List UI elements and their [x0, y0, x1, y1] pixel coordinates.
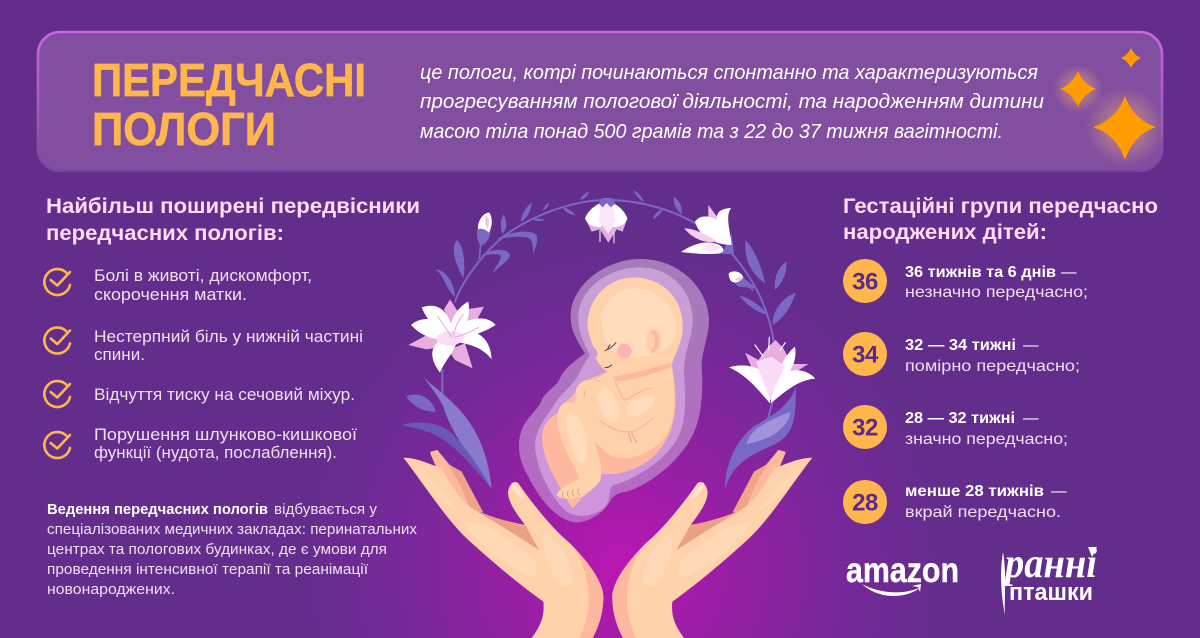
left leaves: [401, 378, 492, 488]
right heading: [843, 195, 1158, 244]
left heading: Найбільш поширені передвісники: [46, 195, 420, 218]
gestational group 34: 34: [852, 342, 879, 368]
wreath leaves: [435, 190, 796, 325]
gestational group 32: —: [1023, 410, 1039, 427]
management paragraph: новонароджених.: [47, 582, 175, 598]
gestational group 32: 32: [852, 414, 878, 442]
flower: left lily: [408, 299, 496, 373]
symptom 4: [44, 425, 357, 462]
symptom 3: [44, 381, 355, 407]
gestational group 32: [843, 405, 1068, 449]
right leaf: [725, 386, 796, 489]
amniotic sac outer layer: [519, 259, 709, 522]
management paragraph: Ведення передчасних пологів: [47, 502, 268, 518]
gestational group 34: помірно передчасно;: [905, 358, 1080, 375]
logo: ранні пташки: ранні: [1002, 541, 1097, 587]
gestational group 28: менше 28 тижнів: [905, 483, 1044, 500]
symptom 4: функції (нудота, послаблення).: [94, 443, 337, 462]
definition text: це пологи, котрі починаються спонтанно та характеризуються: [420, 62, 1038, 84]
flower: small right bud: [729, 271, 757, 288]
left heading: [46, 195, 420, 245]
right heading: народжених дітей:: [843, 221, 1047, 244]
gestational group 36: —: [1061, 264, 1077, 281]
gestational group 34: [843, 332, 1080, 376]
management paragraph: спеціалізованих медичних закладах: перинатальних: [47, 522, 418, 538]
icon: sparkles: [1053, 48, 1165, 167]
symptom 2: Нестерпний біль у нижній частині: [94, 327, 363, 346]
amniotic sac inner layer: [535, 267, 693, 516]
symptom 1: [44, 266, 312, 304]
logo: ранні пташки: [1001, 541, 1097, 615]
baby: [542, 278, 683, 508]
left hand: [403, 450, 603, 638]
gestational group 36: незначно передчасно;: [905, 284, 1088, 301]
symptom 3: Відчуття тиску на сечовий міхур.: [94, 385, 355, 404]
symptoms list: [44, 266, 363, 462]
gestational group 36: [843, 259, 1088, 303]
gestational group 32: 28 — 32 тижні: [905, 410, 1015, 427]
management paragraph: [47, 502, 418, 598]
flower: top bell: [585, 198, 627, 243]
gestational group 28: [843, 480, 1067, 524]
gestational group 28: 28: [852, 490, 878, 516]
title: [92, 54, 366, 155]
title: ПЕРЕДЧАСНІ: [92, 54, 366, 106]
gestational group 28: —: [1051, 483, 1067, 500]
illustration: baby held by hands with floral wreath: [401, 190, 815, 638]
flower: right lily: [729, 337, 815, 403]
logo: amazon: amazon: [846, 551, 959, 590]
floral wreath vines: [442, 200, 774, 423]
symptom 1: Болі в животі, дискомфорт,: [94, 266, 312, 285]
right hand: [612, 450, 812, 638]
definition text: масою тіла понад 500 грамів та з 22 до 37 тижня вагітності.: [420, 121, 1003, 143]
gestational group 34: 32 — 34 тижні: [905, 337, 1016, 354]
left heading: передчасних пологів:: [46, 222, 284, 245]
flower: left bud: [477, 213, 492, 246]
management paragraph: проведення інтенсивної терапії та реанімації: [47, 562, 368, 578]
flower: top right tulip: [681, 205, 734, 254]
definition text: прогресуванням пологової діяльності, та народженням дитини: [420, 91, 1044, 113]
symptom 2: [44, 327, 363, 364]
gestational group 36: 36 тижнів та 6 днів: [905, 264, 1056, 281]
management paragraph: центрах та пологових будинках, де є умови для: [47, 542, 387, 558]
panel: header definition: [38, 32, 1165, 171]
gestational group 36: 36: [852, 268, 878, 296]
definition text: [420, 62, 1044, 143]
symptom 2: спини.: [94, 345, 145, 364]
gestational group 28: вкрай передчасно.: [905, 504, 1061, 521]
logo: ранні пташки: пташки: [1009, 579, 1093, 606]
gestational group 34: —: [1023, 337, 1039, 354]
symptom 4: Порушення шлунково-кишкової: [94, 425, 357, 444]
title: ПОЛОГИ: [92, 103, 276, 155]
symptom 1: скорочення матки.: [94, 285, 247, 304]
gestational group 32: значно передчасно;: [905, 431, 1068, 448]
management paragraph: відбувається у: [274, 502, 378, 518]
right heading: Гестаційні групи передчасно: [843, 195, 1158, 218]
